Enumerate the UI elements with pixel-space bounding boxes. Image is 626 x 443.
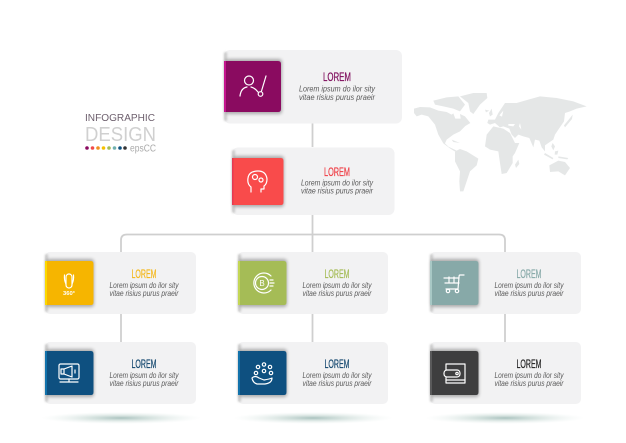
icon: 360 view: 360° — [63, 291, 76, 297]
heading: LOREM — [132, 269, 156, 281]
heading: LOREM — [516, 359, 542, 371]
heading: LOREM — [324, 359, 350, 371]
text block — [110, 281, 179, 298]
text block: Lorem ipsum do ilor sity — [494, 281, 564, 290]
logo: infographic design: INFOGRAPHIC — [85, 113, 155, 124]
panel: top card purple — [224, 50, 402, 124]
icon: wallet — [444, 364, 465, 383]
icon: megaphone on monitor — [59, 364, 79, 382]
icon: person with pointer — [240, 76, 266, 96]
panel: second card red — [232, 148, 394, 215]
text block — [494, 371, 564, 388]
text block: vitae risius purus praeir — [302, 379, 372, 388]
text block: Lorem ipsum do ilor sity — [299, 84, 376, 94]
icon: people in hand — [252, 363, 273, 384]
heading: LOREM — [323, 72, 351, 84]
text block: Lorem ipsum do ilor sity — [302, 371, 372, 380]
icon: 360 view — [63, 274, 76, 297]
logo: infographic design: epsCC — [130, 144, 156, 154]
logo: infographic design — [85, 113, 156, 154]
text block: Lorem ipsum do ilor sity — [110, 371, 179, 380]
text block — [494, 281, 564, 298]
icon: head with gears — [248, 171, 267, 192]
text block: vitae risius purus praeir — [302, 289, 372, 298]
panel: dark card — [430, 342, 581, 404]
text block — [301, 178, 374, 196]
text block: vitae risius purus praeir — [110, 379, 179, 388]
panel: teal card — [430, 252, 581, 314]
panel: green card — [238, 252, 388, 314]
text block: Lorem ipsum do ilor sity — [301, 178, 374, 188]
panel: blue card middle — [238, 342, 388, 404]
connector lines — [121, 123, 505, 342]
floor shadows — [41, 412, 585, 424]
text block: Lorem ipsum do ilor sity — [110, 281, 179, 290]
text block — [299, 84, 376, 102]
icon: shopping cart — [444, 275, 464, 293]
icon: bitcoin coin — [254, 273, 274, 293]
logo: infographic design: DESIGN — [85, 124, 156, 146]
text block: vitae risius purus praeir — [494, 379, 564, 388]
text block: vitae risius purus praeir — [494, 289, 564, 298]
heading: LOREM — [132, 359, 156, 371]
text block — [302, 281, 372, 298]
text block: vitae risius purus praeir — [299, 93, 375, 102]
heading: LOREM — [324, 167, 350, 179]
text block: Lorem ipsum do ilor sity — [494, 371, 564, 380]
text block: vitae risius purus praeir — [110, 289, 179, 298]
text block — [110, 371, 179, 388]
text block: Lorem ipsum do ilor sity — [302, 281, 372, 290]
icon: bitcoin coin: B — [259, 279, 265, 288]
world map — [414, 93, 587, 191]
heading: LOREM — [516, 269, 542, 281]
panel: blue card left — [45, 342, 196, 404]
panel: yellow card — [45, 252, 196, 314]
text block: vitae risius purus praeir — [301, 186, 373, 196]
text block — [302, 371, 372, 388]
heading: LOREM — [324, 269, 350, 281]
